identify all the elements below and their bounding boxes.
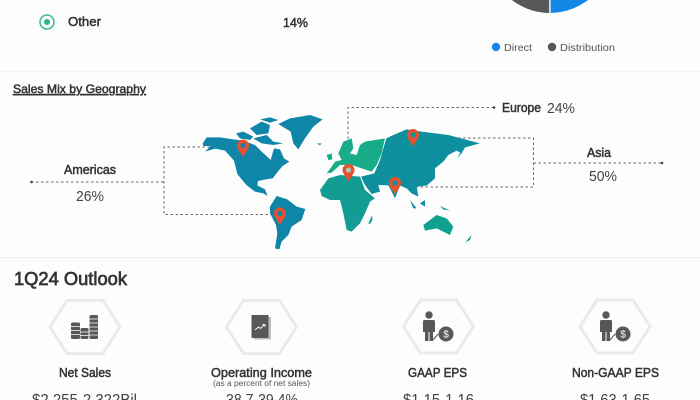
panel: non-gaap eps <box>572 300 659 400</box>
icon: south asia pin <box>389 177 401 194</box>
icon: north asia pin <box>407 129 419 146</box>
row: other sales share <box>40 14 308 30</box>
panel: net sales <box>32 300 137 400</box>
label: americas: 26% <box>76 188 104 205</box>
chart legend: Distribution <box>560 42 615 54</box>
label: other: Other <box>68 14 102 29</box>
label: europe: Europe <box>502 101 541 115</box>
label: europe <box>502 100 575 117</box>
icon: americas south pin <box>274 208 286 225</box>
heading: sales mix by geography: Sales Mix by Geography <box>13 82 146 96</box>
connector: europe <box>348 106 495 164</box>
value: other share: 14% <box>283 15 308 30</box>
label: americas: Americas <box>64 163 116 177</box>
icon: person with dollar coin: $ <box>620 330 626 340</box>
icon: americas north pin <box>237 140 249 157</box>
panel: gaap eps <box>403 300 474 400</box>
label: non-gaap eps: Non-GAAP EPS <box>572 365 659 380</box>
icon: europe pin <box>342 164 354 182</box>
label: asia <box>587 146 617 185</box>
chart legend <box>492 42 615 54</box>
label: net sales: Net Sales <box>59 365 111 380</box>
label: gaap eps: GAAP EPS <box>408 365 467 380</box>
panel: operating income <box>211 300 312 400</box>
heading: 1q24 outlook: 1Q24 Outlook <box>14 269 128 289</box>
connector: asia <box>408 138 663 187</box>
label: operating income: Operating Income <box>211 365 312 380</box>
icon: chart book <box>226 300 296 354</box>
icon: other bullet <box>40 15 54 29</box>
pie chart: direct vs distribution <box>488 0 612 15</box>
label: asia: 50% <box>589 168 617 185</box>
chart legend: Direct <box>504 42 532 54</box>
icon: coin stacks <box>50 300 120 354</box>
world map <box>203 115 480 249</box>
label: americas <box>64 163 116 205</box>
label: europe: 24% <box>547 100 575 117</box>
icon: person with dollar coin: $ <box>443 330 449 340</box>
note: as a percent of net sales: (as a percent of net sales) <box>213 379 310 388</box>
connector: americas <box>30 147 275 214</box>
label: asia: Asia <box>587 146 611 160</box>
